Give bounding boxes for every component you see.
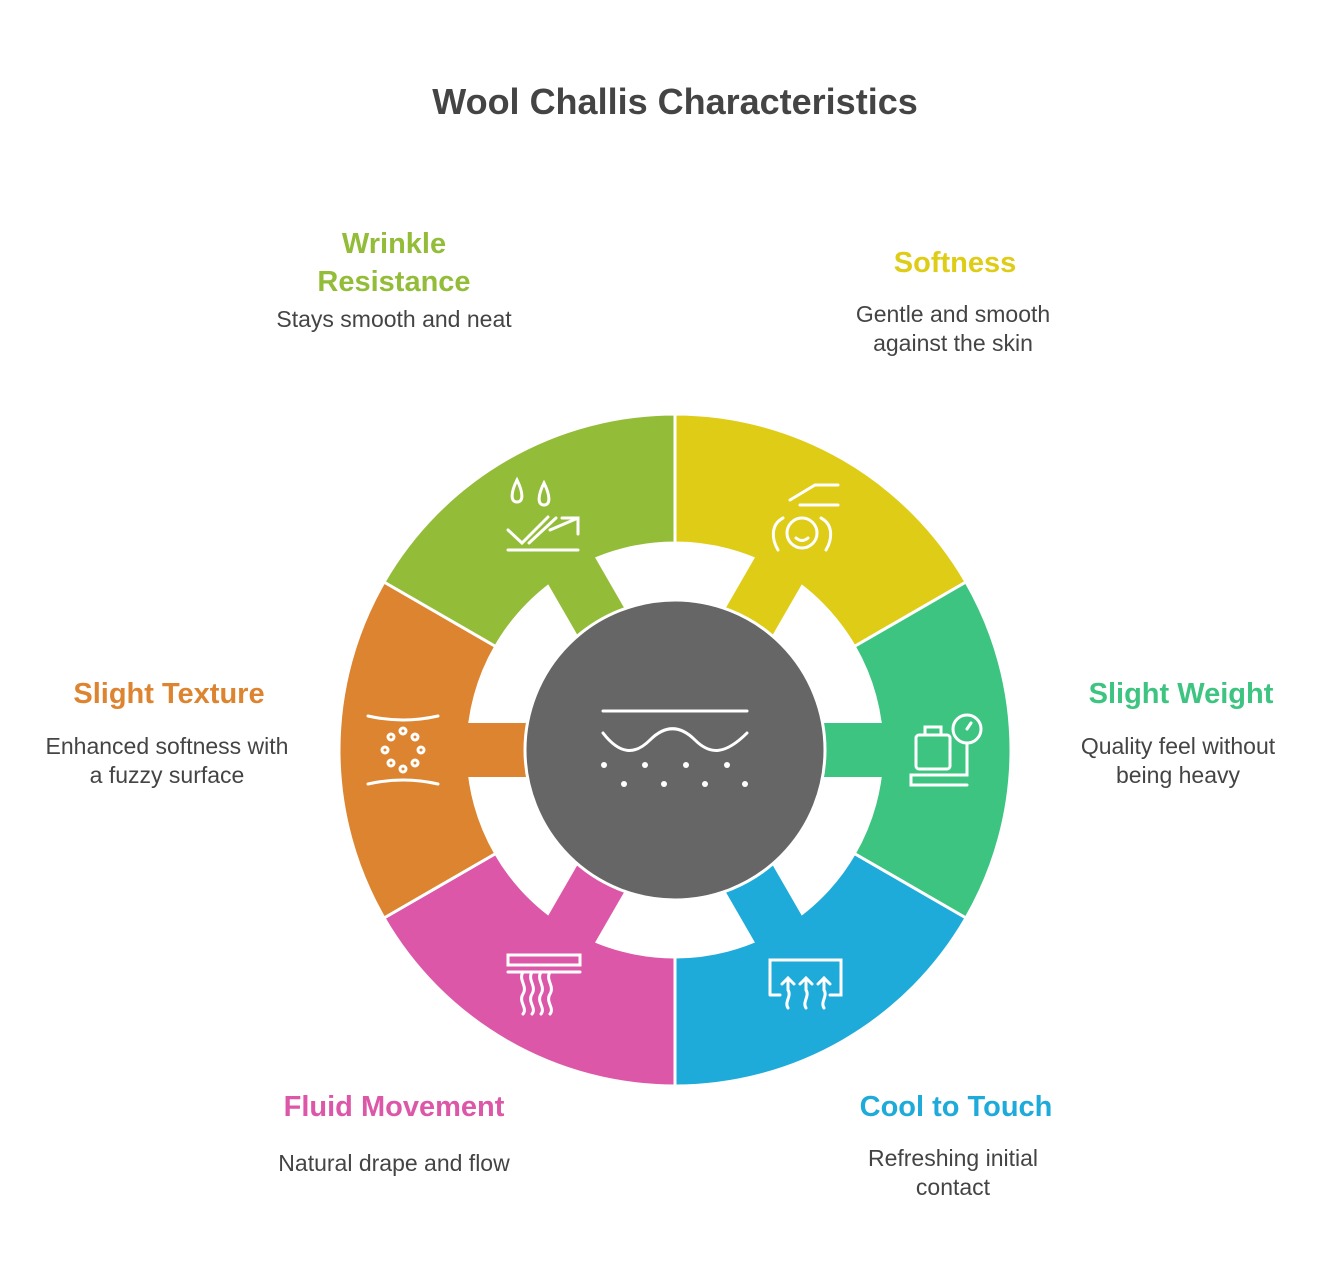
text: contact (916, 1174, 990, 1200)
title: Wool Challis Characteristics (432, 81, 918, 122)
text: Slight Texture (73, 678, 265, 710)
segment: slight texture (339, 582, 535, 918)
text: Wrinkle (342, 228, 446, 260)
icon: texture (368, 716, 438, 784)
text: against the skin (873, 330, 1033, 356)
text: Fluid Movement (284, 1091, 504, 1123)
segment: fluid movement (384, 854, 675, 1086)
segment: slight weight (815, 582, 1011, 918)
text: Enhanced softness with (46, 733, 288, 759)
text: Slight Weight (1089, 678, 1273, 710)
text: Refreshing initial (868, 1145, 1038, 1171)
label: slight weight (1081, 678, 1275, 788)
text: Resistance (317, 266, 471, 298)
segment: wrinkle resistance (384, 414, 675, 646)
label: slight texture (46, 678, 288, 788)
text: Cool to Touch (860, 1091, 1052, 1123)
icon: cool (770, 960, 841, 1008)
segment: cool to touch (675, 854, 966, 1086)
text: Softness (894, 247, 1016, 279)
icon: weight (911, 715, 981, 785)
center circle (525, 600, 825, 900)
text: being heavy (1116, 762, 1240, 788)
icon: wrinkle (508, 480, 578, 550)
text: a fuzzy surface (90, 762, 244, 788)
label: softness (856, 247, 1050, 356)
label: wrinkle resistance (276, 228, 512, 332)
icon: softness (773, 485, 838, 550)
text: Natural drape and flow (278, 1150, 510, 1176)
icon: fabric center (601, 711, 748, 787)
icon: drape (508, 955, 580, 1014)
segment: softness (675, 414, 966, 646)
text: Quality feel without (1081, 733, 1275, 759)
label: fluid movement (278, 1091, 510, 1176)
text: Stays smooth and neat (276, 306, 512, 332)
label: cool to touch (860, 1091, 1052, 1200)
text: Gentle and smooth (856, 301, 1050, 327)
